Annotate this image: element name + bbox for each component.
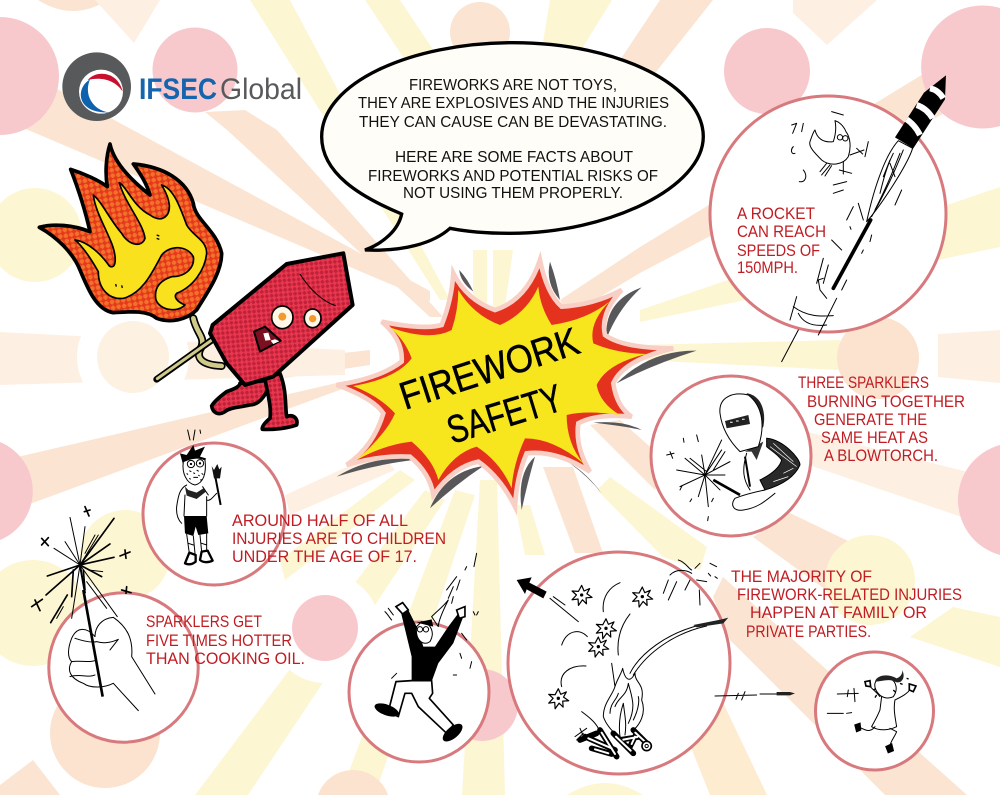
fact: majority of injuries text: PRIVATE PARTIES. <box>746 622 871 641</box>
icon: welder with mask <box>667 393 800 521</box>
speech bubble with intro text: NOT USING THEM PROPERLY. <box>403 185 623 202</box>
icon: hand holding sparkler <box>32 507 155 711</box>
legs <box>212 373 297 429</box>
fact: three sparklers text <box>798 373 965 465</box>
icon: rocket trail <box>782 75 946 362</box>
panel: children injuries <box>143 430 285 585</box>
fact: rocket speed text: A ROCKET <box>737 204 815 223</box>
panel: person hit by firework <box>349 553 489 762</box>
character: walking firework with flaming torch <box>39 144 353 429</box>
starburst: Firework Safety title: SAFETY <box>442 377 567 453</box>
fact: three sparklers text: SAME HEAT AS <box>821 428 928 447</box>
fact: children text: UNDER THE AGE OF 17. <box>232 547 417 566</box>
logo: IFSEC Global <box>62 52 302 121</box>
fact: rocket speed text: 150MPH. <box>737 258 798 277</box>
burst shadow shards <box>337 262 697 510</box>
starburst: Firework Safety title: FIREWORK <box>394 320 585 419</box>
face: eyes and mouth <box>254 306 321 352</box>
fact: rocket speed text <box>737 204 826 277</box>
fact: three sparklers text: GENERATE THE <box>814 410 927 429</box>
icon: bonfire with flying fireworks <box>517 560 728 757</box>
fact: rocket speed text: CAN REACH <box>737 222 826 241</box>
speech bubble with intro text <box>322 43 703 250</box>
fact: three sparklers text: A BLOWTORCH. <box>824 446 938 465</box>
speech bubble with intro text: THEY CAN CAUSE CAN BE DEVASTATING. <box>359 114 667 131</box>
speech bubble with intro text: THEY ARE EXPLOSIVES AND THE INJURIES <box>358 95 669 112</box>
firework body <box>210 253 353 385</box>
fact: sparklers cooking oil text: THAN COOKING OIL. <box>146 649 305 668</box>
flame <box>39 144 222 321</box>
fact: sparklers cooking oil text: SPARKLERS GET <box>146 612 262 631</box>
icon: flying rocket and running girl <box>715 669 916 753</box>
icon: panicked man <box>373 553 478 745</box>
starburst: Firework Safety title <box>337 260 697 510</box>
fact: children text: AROUND HALF OF ALL <box>232 511 408 530</box>
panel: rocket speed <box>710 75 946 362</box>
fact: children text: INJURIES ARE TO CHILDREN <box>232 529 446 548</box>
fact: majority of injuries text <box>731 567 962 641</box>
panel: sparkler in hand <box>32 507 198 742</box>
panel: girl running from firework <box>715 652 934 770</box>
panel: sparklers as hot as a blowtorch <box>651 376 811 536</box>
fact: sparklers cooking oil text <box>146 612 305 668</box>
fact: majority of injuries text: THE MAJORITY OF <box>731 567 872 586</box>
torch stick and fuse <box>157 318 222 379</box>
fact: three sparklers text: BURNING TOGETHER <box>807 392 965 411</box>
logo: IFSEC Global: IFSEC <box>139 73 217 106</box>
fact: majority of injuries text: FIREWORK-RELATED INJURIES <box>737 585 962 604</box>
icon: startled bird <box>792 112 868 193</box>
speech bubble with intro text: HERE ARE SOME FACTS ABOUT <box>395 149 634 166</box>
speech bubble with intro text: FIREWORKS ARE NOT TOYS, <box>409 77 617 94</box>
fact: majority of injuries text: HAPPEN AT FAMILY OR <box>750 603 927 622</box>
speech bubble with intro text: FIREWORKS AND POTENTIAL RISKS OF <box>368 168 658 185</box>
burst red and yellow star <box>337 260 673 507</box>
panel: bonfire party <box>508 552 730 774</box>
fact: children text <box>232 511 446 566</box>
icon: boy with injured face <box>177 430 222 564</box>
logo: IFSEC Global: Global <box>220 73 302 106</box>
fact: rocket speed text: SPEEDS OF <box>737 241 820 260</box>
fact: sparklers cooking oil text: FIVE TIMES HOTTER <box>146 631 292 650</box>
fact: three sparklers text: THREE SPARKLERS <box>798 373 929 392</box>
